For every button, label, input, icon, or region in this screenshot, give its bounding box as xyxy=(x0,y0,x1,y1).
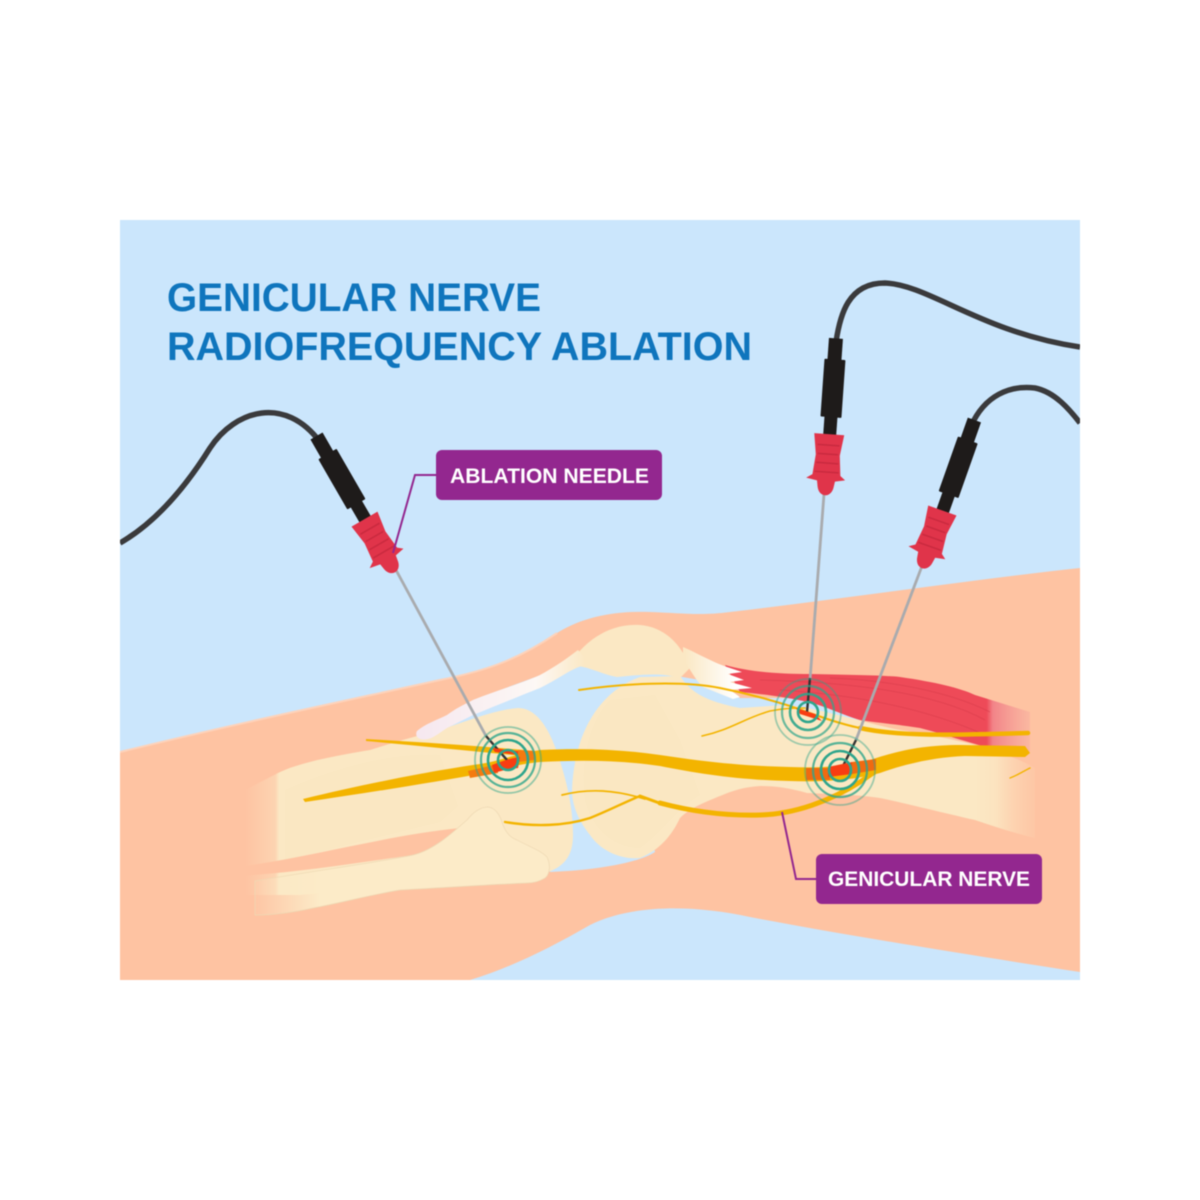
skin highlight edge xyxy=(120,633,557,752)
needle handle left xyxy=(310,432,404,574)
ablation zone centre xyxy=(775,679,841,745)
patella bone xyxy=(568,625,690,678)
label: ablation needle: ABLATION NEEDLE xyxy=(450,464,649,488)
upper femoral branch xyxy=(579,684,860,728)
cable right xyxy=(971,387,1080,426)
title: RADIOFREQUENCY ABLATION xyxy=(167,325,752,369)
leg skin xyxy=(120,568,1080,980)
lower genicular branch xyxy=(657,774,876,818)
tibia bone xyxy=(245,708,573,895)
fibula bone xyxy=(254,828,549,916)
label: genicular nerve: GENICULAR NERVE xyxy=(828,867,1030,891)
needle tips xyxy=(486,678,856,770)
patellar tendon xyxy=(416,650,590,740)
joint space xyxy=(450,666,860,872)
muscle xyxy=(725,665,1030,752)
main genicular nerve xyxy=(303,745,1030,802)
label: genicular nerve xyxy=(816,854,1042,904)
needle handle centre xyxy=(806,337,846,496)
needle shafts xyxy=(396,494,922,740)
skin wedge between tibia and fibula xyxy=(260,828,456,874)
leader line: ablation needle xyxy=(393,475,437,553)
ablation zone left xyxy=(468,727,541,793)
ablation zone right xyxy=(805,735,876,805)
title: GENICULAR NERVE xyxy=(167,276,541,320)
cable left xyxy=(120,413,320,543)
leader line: genicular nerve xyxy=(782,812,817,879)
nerve branches xyxy=(303,684,1030,825)
cable centre xyxy=(836,283,1080,347)
upper thin tibial branch xyxy=(366,739,535,757)
panel: background xyxy=(120,220,1080,980)
label: ablation needle xyxy=(436,450,662,500)
femur bone xyxy=(572,676,1035,858)
infographic xyxy=(119,220,1081,980)
title xyxy=(167,276,752,369)
needle handle right xyxy=(908,417,982,570)
quadriceps tendon xyxy=(683,647,752,699)
